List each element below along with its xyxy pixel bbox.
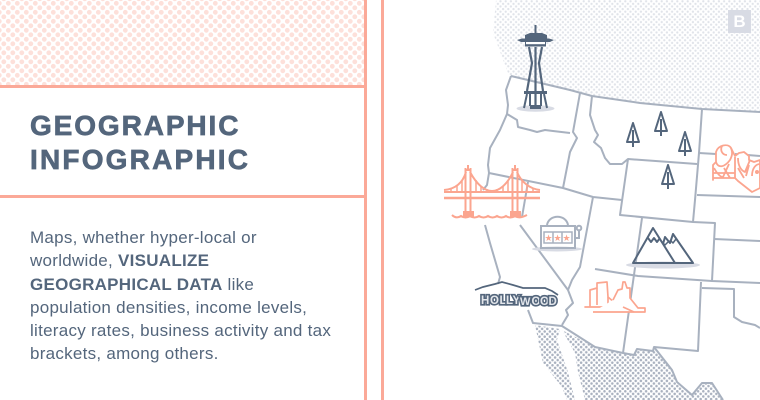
- body text: population densities, income levels,: [30, 298, 307, 317]
- Canada stipple: [493, 0, 760, 112]
- icon: pine trees: [627, 112, 691, 189]
- icon: monument valley buttes: [585, 282, 645, 312]
- Mexico stipple: [535, 325, 723, 400]
- title: [30, 110, 250, 175]
- body text: [30, 228, 331, 363]
- icon: hollywood sign: W: [520, 296, 531, 308]
- state borders: [483, 76, 760, 400]
- icon: slot machine: [532, 217, 582, 252]
- icon: hollywood sign: Y: [512, 295, 520, 307]
- icon: hollywood sign: O: [532, 296, 540, 308]
- icon: space needle: [516, 25, 554, 112]
- logo badge: [728, 10, 751, 33]
- title: INFOGRAPHIC: [30, 144, 250, 175]
- icon: hollywood sign: L: [506, 295, 513, 307]
- logo badge: B: [733, 12, 746, 31]
- icon: slot machine: ★: [553, 234, 562, 244]
- icon: slot machine: ★: [544, 234, 553, 244]
- body text: literacy rates, business activity and tax: [30, 321, 331, 340]
- body text: brackets, among others.: [30, 344, 219, 363]
- icon: hollywood sign: L: [500, 295, 507, 307]
- icon: hollywood sign: O: [490, 295, 499, 307]
- body text: GEOGRAPHICAL DATA like: [30, 275, 254, 294]
- icon: hollywood sign: [475, 282, 558, 308]
- icon: hollywood sign: H: [481, 295, 489, 307]
- icon: golden gate bridge: [444, 165, 540, 218]
- title: GEOGRAPHIC: [30, 110, 240, 141]
- icon: slot machine: ★: [562, 234, 571, 244]
- body text: Maps, whether hyper-local or: [30, 228, 257, 247]
- icon: mountains: [626, 228, 700, 268]
- icon: hollywood sign: D: [548, 296, 557, 308]
- body text: worldwide, VISUALIZE: [30, 251, 209, 270]
- icon: mount rushmore: [713, 145, 760, 192]
- icon: hollywood sign: O: [540, 296, 549, 308]
